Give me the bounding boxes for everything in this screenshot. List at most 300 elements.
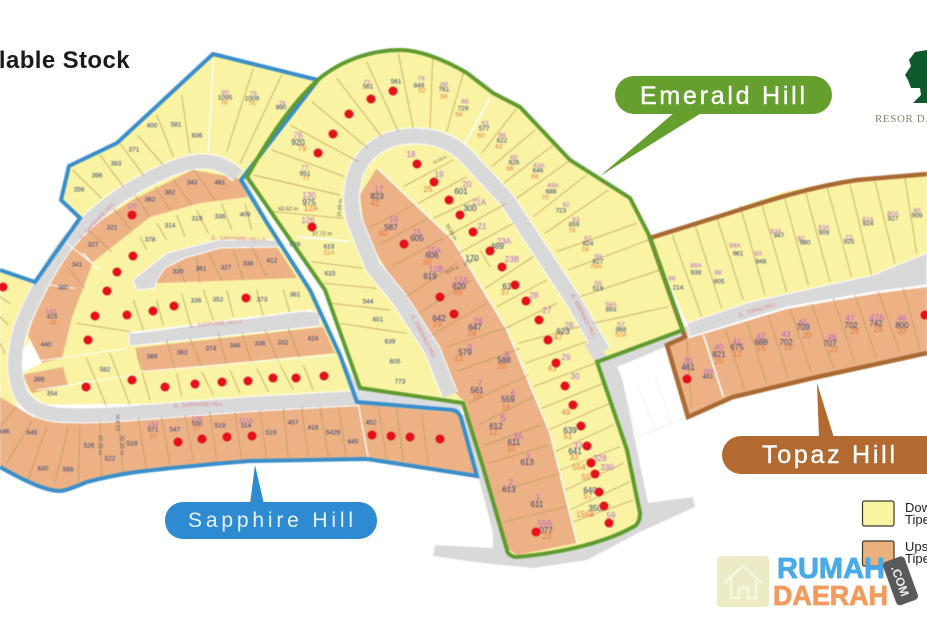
lot labels: Sapphire Hill: 440 xyxy=(41,342,52,349)
lot labels: Topaz Hill: 461 xyxy=(681,363,695,372)
lot labels: Emerald Hill: 975 xyxy=(302,198,316,207)
lot labels: Emerald Hill: 12 xyxy=(489,428,498,437)
lot labels: Emerald Hill: 12A xyxy=(304,204,319,213)
lot labels: Emerald Hill: 43A xyxy=(533,163,545,170)
dimension labels: 41.03 m xyxy=(432,154,448,165)
lot labels: Sapphire Hill: 352 xyxy=(213,297,224,304)
lot labels: Topaz Hill: 40 xyxy=(715,343,724,352)
lot labels: Sapphire Hill: 363 xyxy=(177,350,188,357)
lot labels: Emerald Hill: 11A xyxy=(323,250,335,257)
lot labels: Emerald Hill: 761 xyxy=(439,87,450,94)
lot labels: Topaz Hill: 48 xyxy=(898,314,907,323)
lot labels: Emerald Hill: 620 xyxy=(452,282,466,291)
lot labels: Sapphire Hill: 373 xyxy=(257,297,268,304)
callout: Sapphire Hill: Sapphire Hill xyxy=(188,509,353,532)
lot labels: Emerald Hill: 23B xyxy=(505,255,519,264)
lot labels: Topaz Hill: 821 xyxy=(712,350,726,359)
lot labels: Topaz Hill: 88 xyxy=(714,270,722,277)
lot labels: Topaz Hill: 909 xyxy=(819,230,830,237)
lot labels: Topaz Hill: 16 xyxy=(757,344,766,353)
lot labels: Topaz Hill: 742 xyxy=(869,319,883,328)
lot labels: Sapphire Hill: 452 xyxy=(366,420,377,427)
lot labels: Emerald Hill: 622 xyxy=(497,138,508,145)
lot labels: Emerald Hill: 58A xyxy=(605,302,617,309)
lot labels: Sapphire Hill: 154 xyxy=(148,422,159,429)
lot labels: Emerald Hill: 827 xyxy=(593,259,604,266)
lot labels: Emerald Hill: 561 xyxy=(391,79,402,86)
lot labels: Emerald Hill: 170 xyxy=(465,254,479,263)
lot labels: Emerald Hill: 33 xyxy=(574,441,583,450)
lot labels: Emerald Hill: 39 xyxy=(454,288,463,297)
lot labels: Emerald Hill: 66 xyxy=(461,99,469,106)
lot labels: Emerald Hill: 15A xyxy=(427,246,442,255)
street names: JL. TOPAZ HILL xyxy=(737,302,777,319)
lot labels: Emerald Hill: 60 xyxy=(477,133,485,140)
lot labels: Emerald Hill: 19 xyxy=(435,170,444,179)
lot labels: Emerald Hill: 611 xyxy=(531,500,544,509)
tag: .com xyxy=(882,555,919,606)
lot labels: Emerald Hill: 601 xyxy=(373,317,384,324)
lot labels: Sapphire Hill: 23 xyxy=(149,433,157,440)
lot labels: Topaz Hill: 39A xyxy=(703,369,715,376)
panel: Topaz Hill zone xyxy=(650,172,927,417)
lot labels: Sapphire Hill: 522 xyxy=(105,456,116,463)
lot labels: Emerald Hill: 5 xyxy=(500,414,506,425)
lot labels: Topaz Hill: 214 xyxy=(673,285,684,292)
lot labels: Sapphire Hill: 142 xyxy=(46,309,57,316)
watermark: Rumah Daerah: RUMAH xyxy=(777,553,885,585)
lot labels: Emerald Hill: 10 xyxy=(507,444,516,453)
lot labels: Topaz Hill: 707 xyxy=(823,339,837,348)
lot labels: Sapphire Hill: 645 xyxy=(348,439,359,446)
lot labels: Sapphire Hill: 314 xyxy=(241,423,252,430)
lot labels: Topaz Hill: 39 xyxy=(684,357,693,366)
lot labels: Emerald Hill: 605 xyxy=(390,359,401,366)
lot labels: Emerald Hill: 76 xyxy=(568,228,576,235)
lot labels: Emerald Hill: 615 xyxy=(325,271,336,278)
lot labels: Emerald Hill: 773 xyxy=(395,379,406,386)
lot labels: Emerald Hill: 79 xyxy=(417,76,425,83)
dimension labels: 30.32 m xyxy=(119,435,125,455)
lot labels: Emerald Hill: 951 xyxy=(300,171,311,178)
lot labels: Emerald Hill: 62 xyxy=(495,144,503,151)
dimension labels: 33.88 m xyxy=(444,223,458,241)
dimension labels: 13.3 m xyxy=(115,414,121,431)
lot labels: Emerald Hill: 968 xyxy=(616,327,627,334)
lot labels: Emerald Hill: 613 xyxy=(502,485,516,494)
lot labels: Sapphire Hill: 380 xyxy=(58,285,69,292)
lot labels: Topaz Hill: 81A xyxy=(862,217,874,224)
lot labels: Emerald Hill: 577 xyxy=(479,126,490,133)
lot labels: Emerald Hill: 859 xyxy=(569,222,580,229)
lot labels: Sapphire Hill: 327 xyxy=(88,242,99,249)
lot labels: Emerald Hill: 601 xyxy=(454,187,468,196)
lot labels: Emerald Hill: 79 xyxy=(298,144,307,153)
lot labels: Sapphire Hill: 424 xyxy=(308,336,319,343)
lot labels: Topaz Hill: 800 xyxy=(895,321,909,330)
lot labels: Topaz Hill: 961 xyxy=(733,251,744,258)
lot labels: Topaz Hill: 925 xyxy=(844,239,855,246)
icon: tree xyxy=(905,50,927,103)
lot labels: Topaz Hill: 83 xyxy=(754,251,762,258)
dimension labels: 43.00 m xyxy=(444,264,460,275)
lot labels: Sapphire Hill: 354 xyxy=(47,391,58,398)
dimension labels xyxy=(97,154,478,455)
lot labels: Sapphire Hill: 327 xyxy=(221,265,232,272)
lot labels: Emerald Hill: 623 xyxy=(556,327,570,336)
lot labels: Topaz Hill: 939 xyxy=(691,270,702,277)
lot labels: Topaz Hill: 709 xyxy=(796,323,810,332)
lot labels: Emerald Hill: 23A xyxy=(497,237,512,246)
lot labels: Sapphire Hill: 361 xyxy=(290,292,301,299)
lot labels: Topaz Hill: 83A xyxy=(818,225,830,232)
lot labels: Sapphire Hill: 336 xyxy=(191,298,202,305)
lot labels: Sapphire Hill: 519 xyxy=(266,430,277,437)
lot labels: Emerald Hill: 66 xyxy=(506,166,514,173)
lot labels: Sapphire Hill: 649 xyxy=(27,430,38,437)
lot labels: Topaz Hill: 20 xyxy=(715,357,724,366)
lot labels: Emerald Hill: 126 xyxy=(301,216,315,225)
lot labels: Topaz Hill: 46 xyxy=(828,333,837,342)
lot labels: Sapphire Hill: 336 xyxy=(255,341,266,348)
lot labels: Sapphire Hill: 75 xyxy=(248,101,256,108)
lot labels: Emerald Hill: 18 xyxy=(407,150,416,159)
lot labels: Emerald Hill: 300 xyxy=(463,204,477,213)
lot labels: Sapphire Hill: 547 xyxy=(170,427,181,434)
lot labels: Emerald Hill: 47 xyxy=(554,333,563,342)
lot labels: Topaz Hill: 83A xyxy=(770,229,782,236)
lot labels: Emerald Hill: 20 xyxy=(463,180,472,189)
lot labels: Topaz Hill: 80A xyxy=(887,211,899,218)
lot divider lines: Emerald upper xyxy=(253,53,668,335)
lot labels: Emerald Hill: 49 xyxy=(562,408,571,417)
lot labels: Topaz Hill: 26 xyxy=(851,327,860,336)
lot labels: Topaz Hill: 86 xyxy=(668,276,676,283)
lot labels: Sapphire Hill: 362 xyxy=(165,190,176,197)
lot labels: Sapphire Hill: 76 xyxy=(220,100,228,107)
outer access road xyxy=(433,325,695,568)
lot labels: Emerald Hill: 76 xyxy=(294,131,303,140)
lot labels: Emerald Hill: 26 xyxy=(468,329,477,338)
lot labels: Topaz Hill: 12 xyxy=(733,350,742,359)
lot labels: Emerald Hill: 88 xyxy=(440,82,448,89)
lot labels: Emerald Hill: 642 xyxy=(432,314,446,323)
watermark: Rumah Daerah xyxy=(717,553,919,611)
lot labels: Emerald Hill: 554 xyxy=(572,463,586,472)
lot labels: Topaz Hill: 86A xyxy=(690,263,702,270)
callout: Emerald Hill xyxy=(600,76,832,176)
lot labels: Emerald Hill: 611 xyxy=(508,438,521,447)
lot labels: Emerald Hill: 849 xyxy=(414,83,425,90)
lot labels: Emerald Hill: 559 xyxy=(501,395,515,404)
street names: JL. EMERALD HILL xyxy=(409,313,437,359)
lot labels: Sapphire Hill: 332 xyxy=(278,340,289,347)
lot labels: Sapphire Hill: 582 xyxy=(100,367,111,374)
available stock markers (red dots) xyxy=(0,86,927,536)
lot labels: Topaz Hill: 88A xyxy=(729,243,741,250)
lot labels: Emerald Hill: 612 xyxy=(489,422,503,431)
lot labels: Emerald Hill: 52A xyxy=(615,332,627,339)
lot labels: Emerald Hill: 78 xyxy=(581,247,589,254)
lot labels: Topaz Hill: 45 xyxy=(799,318,808,327)
lot labels: Emerald Hill: 6 xyxy=(511,389,516,398)
lot labels: Emerald Hill: 27 xyxy=(543,306,552,315)
lot labels: Emerald Hill: 3 xyxy=(526,452,531,461)
lot labels: Emerald Hill: 823 xyxy=(370,192,384,201)
zone border: Topaz Hill (brown) xyxy=(650,174,927,417)
lot labels: Topaz Hill: 20 xyxy=(803,331,812,340)
lot labels: Emerald Hill: 17 xyxy=(375,185,384,194)
lot labels: Sapphire Hill: 314 xyxy=(165,223,176,230)
lot labels: Topaz Hill: 33 xyxy=(898,327,907,336)
lot labels: Emerald Hill: 12A xyxy=(454,276,469,285)
lot labels: Sapphire Hill: 369 xyxy=(147,354,158,361)
lot labels: Topaz Hill: 82 xyxy=(797,236,805,243)
lot labels: Emerald Hill: 587 xyxy=(384,223,398,232)
lot labels: Emerald Hill: 18 xyxy=(473,392,482,401)
dimension labels: 43.62 m xyxy=(278,206,298,212)
street names: JL. SAPPHIRE HILL-II xyxy=(211,235,266,243)
lot labels: Topaz Hill: 909 xyxy=(912,213,923,220)
lot labels: Emerald Hill: 57 xyxy=(617,322,625,329)
lot labels: Emerald Hill: 28 xyxy=(433,320,442,329)
lot labels: Emerald Hill: 62 xyxy=(584,236,592,243)
lot labels: Topaz Hill: 22 xyxy=(830,345,839,354)
lot labels: Topaz Hill: 675 xyxy=(730,343,744,352)
lot labels: Emerald Hill: 22 xyxy=(455,354,464,363)
lot labels: Emerald Hill: 641 xyxy=(568,447,582,456)
lot labels: Sapphire Hill: 1009 xyxy=(245,96,260,103)
lot labels: Emerald Hill: 70 xyxy=(541,195,549,202)
lot labels: Sapphire Hill: 416 xyxy=(308,425,319,432)
lot labels: Emerald Hill: 9 xyxy=(468,343,473,352)
lot divider lines: Sapphire lower xyxy=(0,290,428,483)
street names: JL. EMERALD HILL xyxy=(569,292,597,338)
lot labels: Topaz Hill: 47A xyxy=(870,313,885,322)
street names xyxy=(78,201,777,409)
icon: house xyxy=(717,556,769,607)
lot labels: Sapphire Hill: 330 xyxy=(173,269,184,276)
lot labels: Emerald Hill: 619 xyxy=(324,244,335,251)
lot labels: Sapphire Hill: 346 xyxy=(230,343,241,350)
lot labels: Emerald Hill: 77 xyxy=(301,165,309,172)
legend xyxy=(862,500,927,566)
lot divider lines: Topaz xyxy=(672,173,927,408)
lot labels: Sapphire Hill: 530 xyxy=(192,421,203,428)
lot labels: Topaz Hill: 47 xyxy=(846,314,855,323)
lot labels: Emerald Hill: 1568 xyxy=(576,510,594,519)
lot labels: Sapphire Hill: 361 xyxy=(196,266,207,273)
lot labels: Emerald Hill: 62 xyxy=(481,121,489,128)
lot labels: Emerald Hill: 640 xyxy=(583,486,597,495)
lot labels: Emerald Hill: 57 xyxy=(584,492,593,501)
lot labels: Topaz Hill: 688 xyxy=(754,338,768,347)
panel: Sapphire Hill zone xyxy=(0,54,475,491)
lot labels: Emerald Hill: 646 xyxy=(533,168,544,175)
lot labels: Emerald Hill: 28 xyxy=(530,291,539,300)
lot labels: Emerald Hill: 605 xyxy=(410,234,424,243)
lot labels: Sapphire Hill: 336 xyxy=(243,261,254,268)
lot labels: Topaz Hill xyxy=(668,208,923,381)
lot labels: Emerald Hill: 55 xyxy=(582,473,591,482)
lot labels: Emerald Hill: 49A xyxy=(547,183,559,190)
lot labels: Emerald Hill: 7 xyxy=(478,379,483,388)
lot divider lines: Sapphire upper xyxy=(50,60,282,288)
lot labels: Topaz Hill: 18 xyxy=(784,343,793,352)
lot labels: Sapphire Hill: 526 xyxy=(84,443,95,450)
lot labels: Emerald Hill: 723 xyxy=(556,208,567,215)
gap road between Sapphire and Emerald xyxy=(238,178,463,412)
lot labels: Sapphire Hill: 319 xyxy=(192,216,203,223)
lot labels: Sapphire Hill: 409 xyxy=(240,212,251,219)
lot labels: Sapphire Hill: 27 xyxy=(193,426,201,433)
lot labels: Emerald Hill: 544 xyxy=(363,299,374,306)
lot labels: Sapphire Hill: 336 xyxy=(215,214,226,221)
lot labels: Emerald Hill: 43 xyxy=(548,364,557,373)
callout: Topaz Hill: Topaz Hill xyxy=(762,441,895,469)
lot labels: Emerald Hill: 613 xyxy=(520,458,534,467)
lot labels: Sapphire Hill: 571 xyxy=(148,427,159,434)
lot labels: Topaz Hill: 42 xyxy=(757,332,766,341)
lot labels: Sapphire Hill: 321 xyxy=(107,225,118,232)
logo: Resor Dago xyxy=(875,50,927,125)
lot labels: Emerald Hill: 639 xyxy=(563,426,577,435)
lot labels: Emerald Hill: 639 xyxy=(290,242,301,249)
lot labels: Emerald Hill: 77 xyxy=(302,176,310,183)
street names: JL. SAPPHIRE HILL-I xyxy=(188,319,242,330)
lot labels: Sapphire Hill: 383 xyxy=(111,161,122,168)
lot labels: Emerald Hill: 29 xyxy=(474,317,483,326)
lot labels: Sapphire Hill: 630 xyxy=(38,466,49,473)
lot labels: Emerald Hill: 37 xyxy=(501,288,510,297)
lot labels: Emerald Hill: 59 xyxy=(594,254,602,261)
zone border: Sapphire Hill (blue) xyxy=(0,54,477,491)
lot labels: Emerald Hill: 52 xyxy=(418,88,426,95)
zone border: Emerald Hill (green) xyxy=(247,50,683,557)
lot labels: Emerald Hill: 688 xyxy=(546,189,557,196)
lot labels: Emerald Hill: 42 xyxy=(562,202,570,209)
lot labels: Emerald Hill: 21A xyxy=(472,198,487,207)
lot labels: Sapphire Hill: 79 xyxy=(249,91,257,98)
lot labels: Sapphire Hill: 399 xyxy=(34,377,45,384)
lot labels: Sapphire Hill: 461 xyxy=(215,180,226,187)
lot labels: Sapphire Hill: 80 xyxy=(221,90,229,97)
lot labels: Emerald Hill: 12B xyxy=(429,265,443,274)
lot labels: Sapphire Hill: 519 xyxy=(127,441,138,448)
lot labels: Topaz Hill: 905 xyxy=(714,279,725,286)
lot labels: Emerald Hill: 30 xyxy=(571,372,580,381)
lot labels: Emerald Hill: 350 xyxy=(588,504,602,513)
lot labels: Emerald Hill: 579 xyxy=(458,348,472,357)
lot labels: Emerald Hill: 16 xyxy=(502,403,511,412)
lot labels: Sapphire Hill: 1095 xyxy=(218,95,233,102)
lot labels: Emerald Hill: 61 xyxy=(503,282,512,291)
lot labels: Sapphire Hill: 415 xyxy=(47,314,58,321)
lot labels: Emerald Hill: 16 xyxy=(390,215,399,224)
lot labels: Topaz Hill: 41 xyxy=(733,337,742,346)
lot labels: Topaz Hill: 80 xyxy=(913,208,921,215)
lot labels: Topaz Hill: 702 xyxy=(779,338,793,347)
lot labels: Topaz Hill: 28 xyxy=(874,325,883,334)
lot labels: Topaz Hill: 927 xyxy=(888,216,899,223)
lot labels: Emerald Hill: 42 xyxy=(371,199,380,208)
tag: .com: .COM xyxy=(888,564,912,598)
parking area outline xyxy=(617,348,687,437)
lot labels: Emerald Hill: 920 xyxy=(291,138,305,147)
lot labels: Emerald Hill: 23 xyxy=(543,532,552,541)
lot labels: Emerald Hill: 26 xyxy=(498,362,507,371)
lot labels: Emerald Hill: 66 xyxy=(531,174,539,181)
lot labels: Emerald Hill: 38 xyxy=(423,258,432,267)
dimension labels: 37.72 m xyxy=(312,231,332,237)
callout: Topaz Hill xyxy=(722,383,927,474)
lot labels: Sapphire Hill: 112A xyxy=(239,418,254,425)
lot labels: Emerald Hill: 619 xyxy=(423,272,437,281)
dimension labels: 37.35 m xyxy=(97,435,103,455)
dimension labels: 12.90 m xyxy=(462,256,478,267)
lot labels: Emerald Hill: 893 xyxy=(606,307,617,314)
lot labels: Emerald Hill: 56 xyxy=(440,94,448,101)
lot labels: Sapphire Hill: 412 xyxy=(267,258,278,265)
legend item: uphill xyxy=(862,539,927,566)
lot labels: Emerald Hill: 330 xyxy=(600,463,614,472)
lot labels: Emerald Hill: 077 xyxy=(539,526,553,535)
lot labels: Topaz Hill: 924 xyxy=(863,221,874,228)
lot labels: Emerald Hill: 588 xyxy=(497,356,511,365)
lot labels: Sapphire Hill: 371 xyxy=(129,147,140,154)
callout: Sapphire Hill xyxy=(165,465,377,539)
lot labels: Topaz Hill: 702 xyxy=(844,321,858,330)
lot labels: Emerald Hill: 639 xyxy=(385,339,396,346)
lot labels: Sapphire Hill: 362 xyxy=(145,197,156,204)
lot labels: Sapphire Hill: 378 xyxy=(145,237,156,244)
lot labels: Emerald Hill: 51 xyxy=(564,432,573,441)
lot labels: Sapphire Hill: 990 xyxy=(276,105,287,112)
lot labels: Topaz Hill: 948 xyxy=(756,259,767,266)
dimension labels: 15.69 m xyxy=(337,199,344,217)
lot divider lines: Emerald lower xyxy=(447,327,633,522)
lot labels: Emerald Hill: 130 xyxy=(302,191,316,200)
lot labels: Topaz Hill: 72 xyxy=(845,235,853,242)
lot labels: Emerald Hill: 88 xyxy=(498,133,506,140)
lot labels: Emerald Hill: 729 xyxy=(458,106,469,113)
lot labels: Sapphire Hill: 836 xyxy=(192,133,203,140)
lot labels: Emerald Hill: 40 xyxy=(379,229,388,238)
lot labels: Sapphire Hill: 5429 xyxy=(326,430,341,437)
lot labels: Emerald Hill xyxy=(290,76,627,541)
lot labels: Emerald Hill: 647 xyxy=(468,323,482,332)
lot labels: Emerald Hill: 58 xyxy=(594,281,602,288)
panel: Emerald Hill zone xyxy=(247,50,683,557)
lot labels: Topaz Hill: 947 xyxy=(774,233,785,240)
lot labels: Emerald Hill: 561 xyxy=(470,386,484,395)
lot labels: Sapphire Hill: 137 xyxy=(127,204,138,211)
lot labels: Sapphire Hill: 400 xyxy=(147,123,158,130)
lot labels: Sapphire Hill xyxy=(0,90,377,474)
callout: Emerald Hill: Emerald Hill xyxy=(640,82,805,110)
lot labels: Sapphire Hill: 356 xyxy=(74,187,85,194)
street names: JL. SAPPHIRE HILL xyxy=(173,402,223,409)
lot labels: Sapphire Hill: 343 xyxy=(187,180,198,187)
lot labels: Sapphire Hill: 457 xyxy=(288,420,299,427)
lot labels: Emerald Hill: 72 xyxy=(363,80,371,87)
lot labels: Emerald Hill: 606 xyxy=(425,251,439,260)
lot labels: Emerald Hill: 824 xyxy=(583,241,594,248)
lot labels: Sapphire Hill: 519 xyxy=(215,423,226,430)
street names: JL. SAPPHIRE HILL xyxy=(78,201,116,242)
lot labels: Emerald Hill: 1 xyxy=(536,493,541,502)
lot labels: Emerald Hill: 25 xyxy=(424,185,433,194)
